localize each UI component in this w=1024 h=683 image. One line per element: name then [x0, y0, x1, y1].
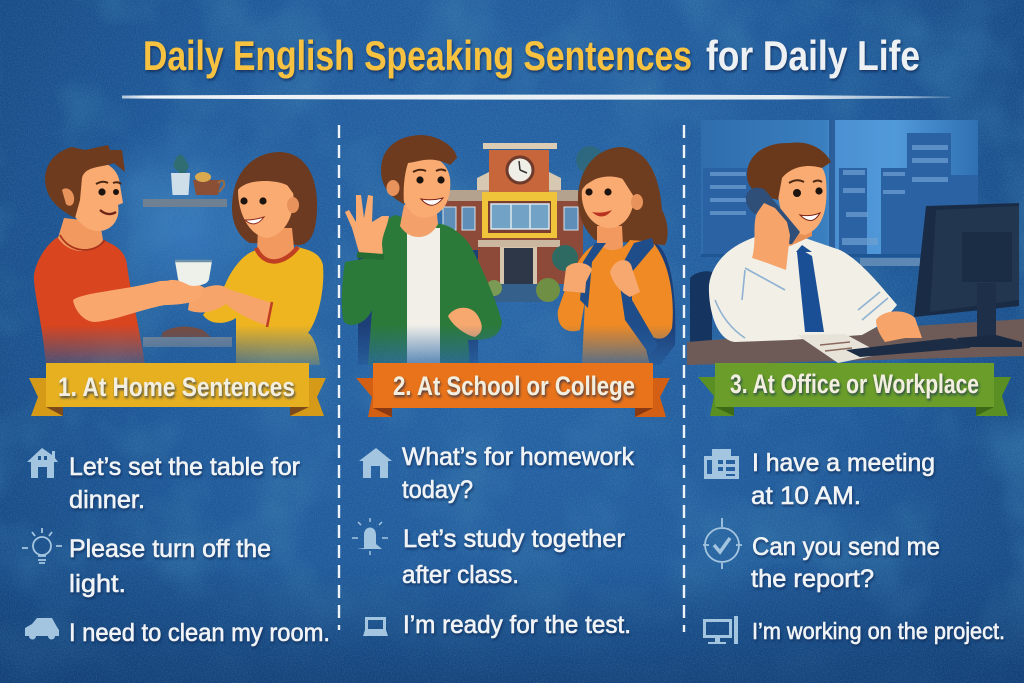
- banner: 3. At Office or Workplace: [698, 363, 1011, 416]
- icon: school house: [359, 448, 392, 478]
- home wall glow: [65, 120, 305, 340]
- list: at school sentences: [352, 443, 634, 639]
- icon: desk bell: [352, 518, 388, 555]
- panel: at school: [342, 135, 675, 365]
- shelf with plant and bowl: [143, 154, 227, 207]
- sentence: Please turn off the: [69, 535, 271, 563]
- girl in orange sweater with backpack: [558, 147, 675, 365]
- sentence: I need to clean my room.: [69, 619, 330, 647]
- icon: car: [25, 618, 59, 640]
- sentence: Let’s study together: [403, 525, 625, 553]
- banner text: 1. At Home Sentences: [58, 372, 295, 402]
- sentence: at 10 AM.: [751, 482, 861, 510]
- title: [143, 32, 920, 79]
- lower shelf with food: [143, 326, 232, 347]
- panel: at office: [687, 120, 1024, 365]
- desk: [687, 319, 1024, 365]
- icon: desktop computer: [703, 616, 738, 644]
- sentence: after class.: [402, 561, 519, 589]
- man in red shirt: [34, 145, 205, 365]
- sentence: I’m ready for the test.: [403, 611, 631, 639]
- icon: laptop: [363, 617, 388, 636]
- icon: office building: [704, 449, 739, 479]
- document on desk: [797, 334, 882, 363]
- cup held between hands: [163, 261, 212, 305]
- banner: 2. At School or College: [356, 363, 670, 417]
- computer monitor: [914, 203, 1022, 347]
- column divider 2: [683, 125, 685, 632]
- sentence: What’s for homework: [402, 443, 634, 471]
- man in white shirt on phone: [709, 142, 922, 342]
- banner text: 2. At School or College: [393, 371, 635, 401]
- boy in green jacket waving: [342, 135, 502, 365]
- woman in yellow sweater: [188, 152, 323, 365]
- school building: [443, 143, 604, 302]
- office window with skyline: [701, 120, 978, 266]
- sentence: light.: [69, 570, 126, 598]
- sentence: today?: [402, 476, 473, 504]
- title: gold part: Daily English Speaking Sentences: [143, 32, 692, 79]
- sentence: Let’s set the table for: [69, 453, 300, 481]
- office chair: [690, 271, 712, 342]
- column divider 1: [338, 125, 340, 630]
- list: at office sentences: [703, 449, 1005, 644]
- panel: at home: [34, 145, 324, 365]
- sentence: dinner.: [69, 486, 145, 514]
- list: at home sentences: [22, 448, 330, 647]
- sentence: Can you send me: [752, 533, 940, 561]
- icon: house: [27, 448, 58, 478]
- icon: light bulb: [22, 528, 62, 563]
- sentence: I have a meeting: [752, 449, 935, 477]
- icon: check target: [703, 518, 742, 569]
- sentence: I’m working on the project.: [752, 618, 1005, 644]
- title: white part: for Daily Life: [706, 32, 920, 79]
- sentence: the report?: [751, 565, 874, 593]
- keyboard: [846, 338, 971, 357]
- banner: 1. At Home Sentences: [29, 363, 326, 416]
- title underline: [122, 95, 950, 100]
